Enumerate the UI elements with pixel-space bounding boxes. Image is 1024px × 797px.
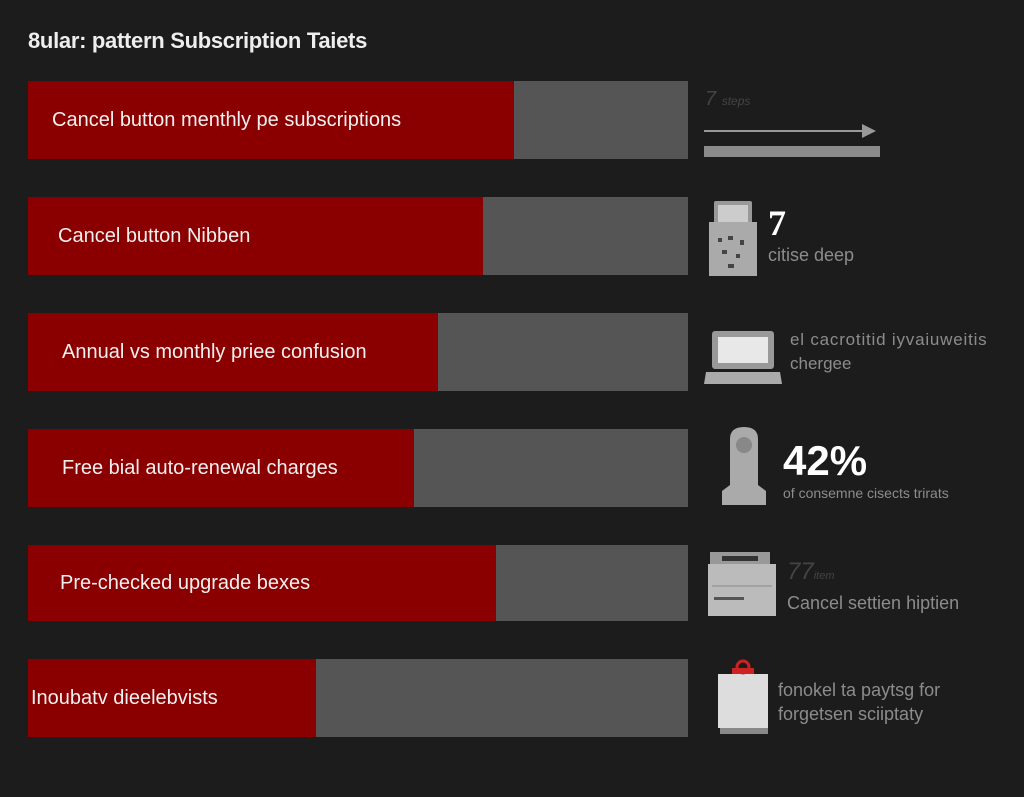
icon: laptop [704,331,782,384]
stat 3: chergee [790,354,851,373]
stat 4 [722,427,949,505]
bar: pre-checked: Pre-checked upgrade bexes [60,572,310,594]
stat 1: steps arrow: 7 steps [705,88,750,110]
stat 4: 42% [783,437,867,484]
icon: box [708,552,776,616]
stat 2: citise deep [768,245,854,265]
stat 6 [718,660,940,734]
stat 6: forgetsen sciiptaty [778,704,923,724]
stat 4: of consemne cisects trirats [783,485,949,501]
bar: cancel button hidden [28,197,688,275]
title: 8ular: pattern Subscription Taiets [28,28,367,53]
stat 6: fonokel ta paytsg for [778,680,940,700]
stat 5: Cancel settien hiptien [787,593,959,613]
stat 2: 7 [768,203,786,243]
bar: free trial [28,429,688,507]
bar: cancel button hidden: Cancel button Nibben [58,225,250,247]
stat 5 [708,552,959,616]
stat 3 [704,330,987,384]
bar: cancel button monthly [28,81,688,159]
bar: annual vs monthly [28,313,688,391]
stat 3: el cacrotitid iyvaiuweitis [790,330,987,349]
bar: pre-checked [28,545,688,621]
icon: documents [718,660,768,734]
bar: free trial: Free bial auto-renewal charges [62,457,338,479]
icon: device [709,201,757,276]
stat 5: 77item [787,558,834,585]
bar: last: Inoubatv dieelebvists [31,687,218,709]
bar: last [28,659,688,737]
bar: cancel button monthly: Cancel button menthly pe subscriptions [52,109,401,131]
bar: annual vs monthly: Annual vs monthly priee confusion [62,341,367,363]
stat 2 [709,201,854,276]
icon: phone [722,427,766,505]
stat 1: steps arrow [704,88,880,157]
